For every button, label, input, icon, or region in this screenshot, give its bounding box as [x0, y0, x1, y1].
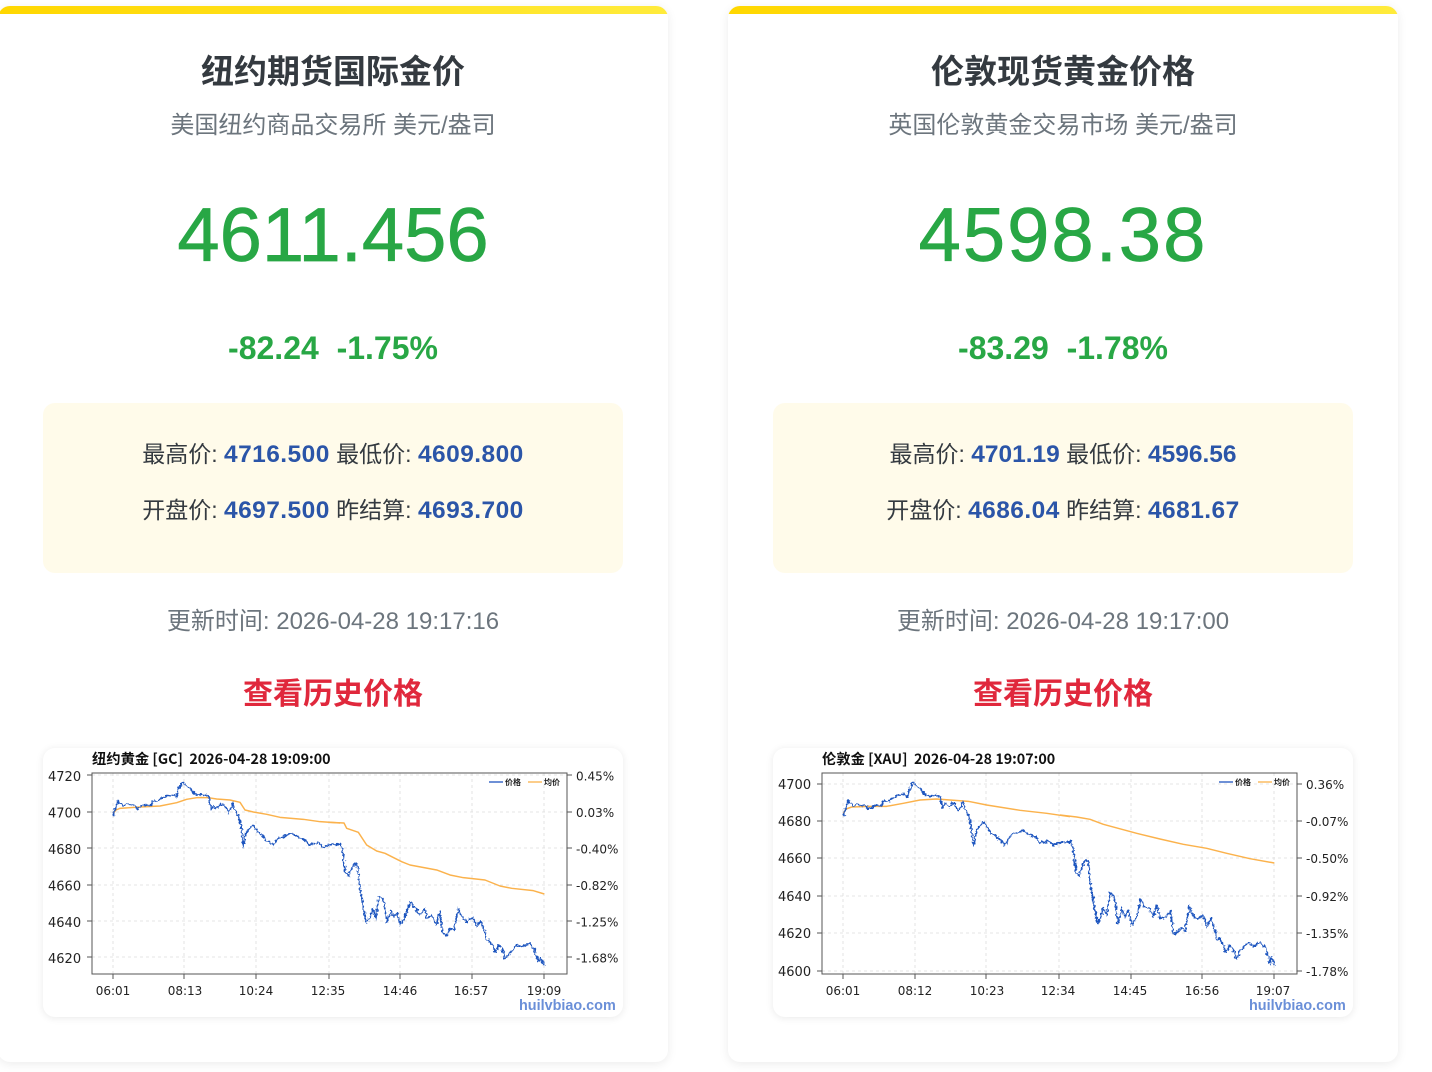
right percent axis labels: [576, 770, 618, 966]
left price axis labels: 4600: [778, 965, 811, 980]
left price axis labels: 4640: [48, 916, 81, 931]
legend: [489, 777, 560, 788]
legend: 价格: [1235, 777, 1251, 788]
time axis labels: [96, 984, 561, 998]
left price axis labels: 4640: [778, 890, 811, 905]
left price axis labels: 4700: [778, 778, 811, 793]
watermark: huilvbiao.com: [519, 998, 616, 1014]
average price line: [113, 798, 544, 894]
price line: [843, 782, 1274, 966]
update time: 更新时间: 2026-04-28 19:17:16: [167, 608, 499, 635]
right percent axis labels: 0.03%: [576, 806, 614, 820]
left price axis labels: [48, 770, 81, 967]
time axis labels: 06:01: [826, 984, 860, 998]
time axis labels: 08:13: [168, 984, 202, 998]
right percent axis labels: -0.92%: [1306, 890, 1348, 904]
left price axis labels: 4680: [778, 815, 811, 830]
legend: 均价: [1274, 777, 1290, 788]
time axis labels: 19:07: [1256, 984, 1290, 998]
time axis labels: 19:09: [527, 984, 561, 998]
update time: 更新时间: 2026-04-28 19:17:00: [897, 608, 1229, 635]
top gold bar: [0, 6, 668, 14]
price change: -82.24 -1.75%: [228, 330, 438, 366]
right percent axis labels: -0.82%: [576, 879, 618, 893]
high and low: 最高价: 4701.19 最低价: 4596.56: [889, 441, 1237, 468]
left price axis labels: [778, 778, 811, 980]
time axis labels: 16:57: [454, 984, 488, 998]
stats box: [43, 403, 623, 573]
right percent axis labels: -1.78%: [1306, 965, 1348, 979]
left price axis labels: 4680: [48, 843, 81, 858]
time axis labels: 16:56: [1185, 984, 1219, 998]
current price: 4611.456: [177, 193, 489, 278]
chart title: 伦敦金 [XAU] 2026-04-28 19:07:00: [822, 748, 1055, 769]
chart title: 纽约黄金 [GC] 2026-04-28 19:09:00: [92, 748, 331, 769]
right percent axis labels: [1306, 778, 1348, 979]
right percent axis labels: -0.07%: [1306, 815, 1348, 829]
right percent axis labels: -1.35%: [1306, 927, 1348, 941]
right percent axis labels: -0.40%: [576, 842, 618, 856]
right percent axis labels: -1.68%: [576, 952, 618, 966]
legend: 价格: [505, 777, 521, 788]
right percent axis labels: -0.50%: [1306, 852, 1348, 866]
time axis labels: 12:35: [311, 984, 345, 998]
left price axis labels: 4720: [48, 770, 81, 785]
right percent axis labels: 0.45%: [576, 770, 614, 784]
time axis labels: 08:12: [898, 984, 932, 998]
time axis labels: 10:24: [239, 984, 273, 998]
watermark: huilvbiao.com: [1249, 998, 1346, 1014]
legend: 均价: [544, 777, 560, 788]
subtitle: 英国伦敦黄金交易市场 美元/盎司: [888, 112, 1238, 139]
left price axis labels: 4660: [48, 880, 81, 894]
line chart: New York gold: [43, 748, 623, 1017]
time axis labels: 10:23: [970, 984, 1004, 998]
open and previous settlement: 开盘价: 4697.500 昨结算: 4693.700: [142, 497, 524, 524]
time axis labels: 12:34: [1041, 984, 1075, 998]
panel: New York futures gold price: [0, 6, 668, 1062]
left price axis labels: 4660: [778, 852, 811, 867]
price change: -83.29 -1.78%: [958, 330, 1168, 366]
average price line: [843, 799, 1274, 863]
top gold bar: [728, 6, 1398, 14]
open and previous settlement: 开盘价: 4686.04 昨结算: 4681.67: [886, 497, 1240, 524]
legend: [1219, 777, 1290, 788]
time axis labels: [826, 984, 1290, 998]
time axis labels: 14:45: [1113, 984, 1147, 998]
right percent axis labels: 0.36%: [1306, 778, 1344, 792]
time axis labels: 06:01: [96, 984, 130, 998]
stats box: [773, 403, 1353, 573]
history link: 查看历史价格: [973, 678, 1153, 711]
panel: London spot gold price: [728, 6, 1398, 1062]
line chart: London gold: [773, 748, 1353, 1017]
left price axis labels: 4620: [778, 927, 811, 942]
left price axis labels: 4620: [48, 952, 81, 967]
left price axis labels: 4700: [48, 806, 81, 822]
current price: 4598.38: [919, 193, 1207, 278]
high and low: 最高价: 4716.500 最低价: 4609.800: [142, 441, 524, 468]
subtitle: 美国纽约商品交易所 美元/盎司: [170, 112, 496, 139]
history link: 查看历史价格: [243, 678, 423, 711]
time axis labels: 14:46: [383, 984, 417, 998]
right percent axis labels: -1.25%: [576, 916, 618, 930]
price line: [113, 782, 544, 966]
heading: 纽约期货国际金价: [201, 53, 465, 90]
heading: 伦敦现货黄金价格: [931, 53, 1195, 90]
